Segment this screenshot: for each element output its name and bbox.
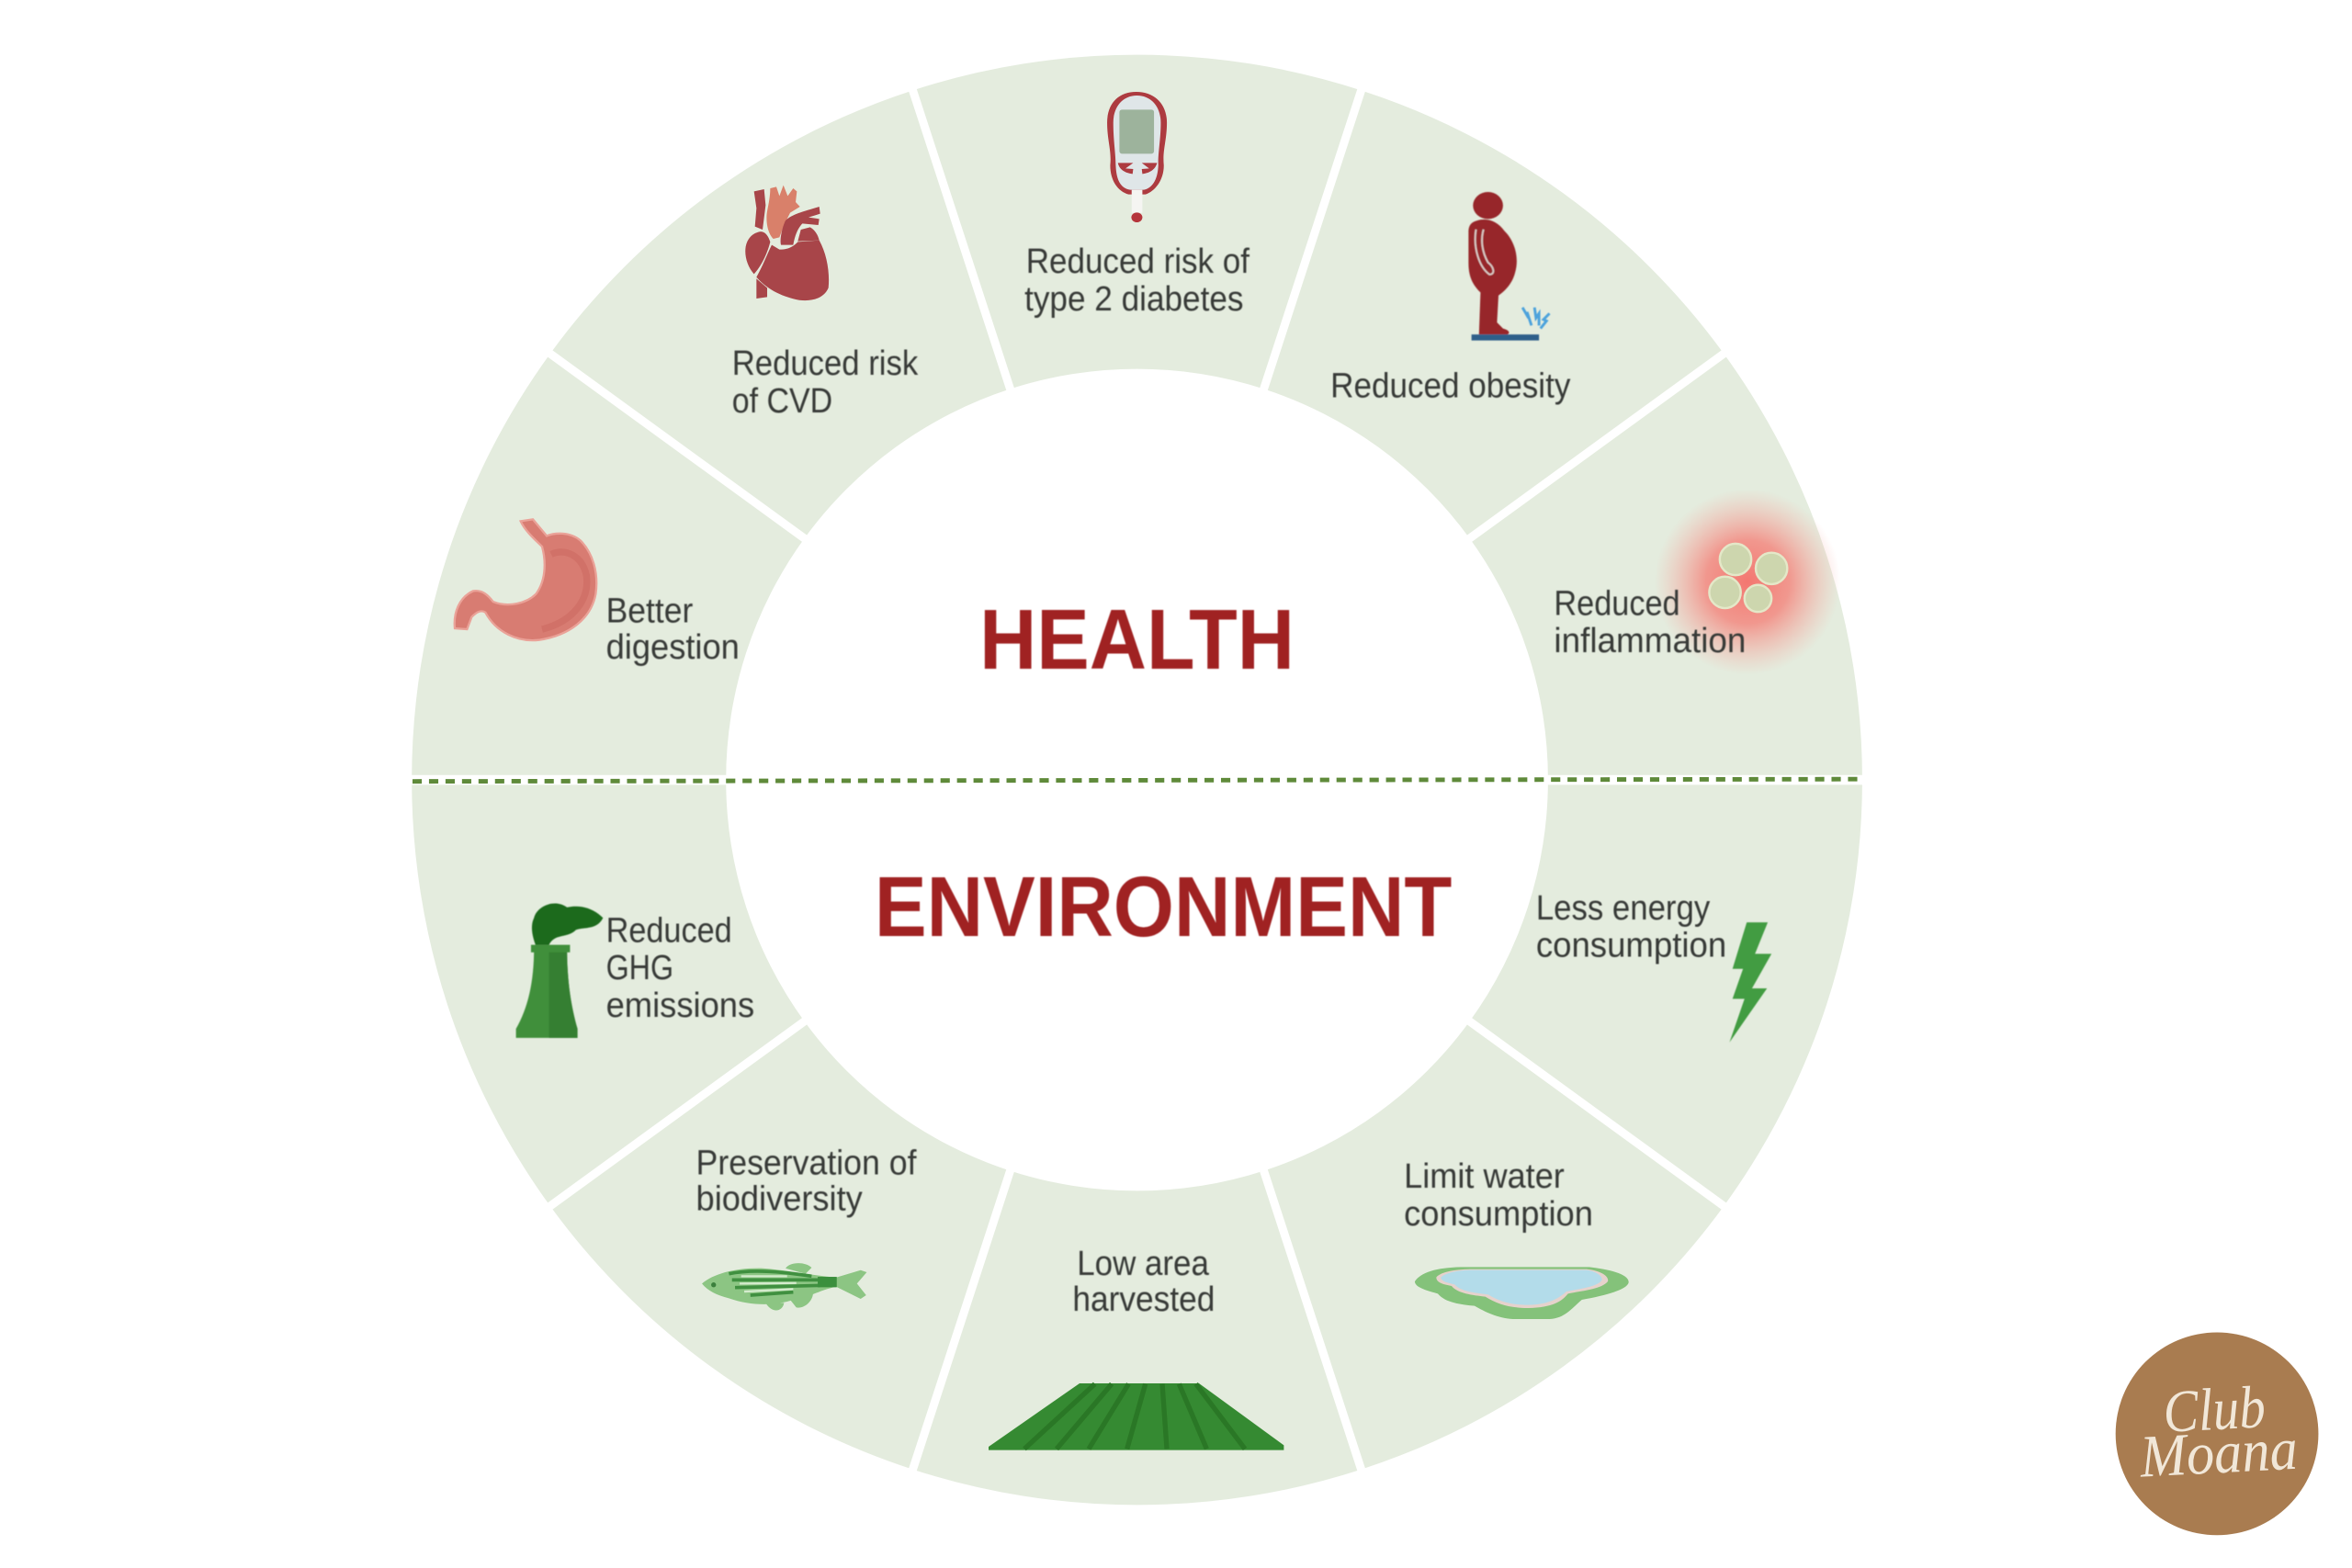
icon: stomach (455, 519, 596, 640)
label: limit water consumption (1404, 1156, 1593, 1233)
logo text: Moana (2138, 1416, 2299, 1491)
label: low area harvested: Low area (1077, 1244, 1209, 1282)
icon: lightning bolt (1729, 922, 1771, 1043)
label: reduced inflammation: Reduced (1554, 583, 1680, 622)
label: reduced risk of CVD: of CVD (732, 381, 832, 420)
heading: health: HEALTH (979, 592, 1295, 687)
label: less energy consumption: Less energy (1536, 888, 1710, 927)
panel: reduced risk of CVD (550, 90, 1010, 538)
panel: reduced inflammation (1470, 354, 1862, 780)
icon: glucose meter (1107, 92, 1167, 222)
panel: better digestion (412, 354, 805, 780)
icon: obese person on scale (1468, 192, 1550, 341)
icon: crop field (989, 1383, 1283, 1450)
icon: inflamed cells with red glow (1655, 489, 1840, 675)
label: reduced obesity: Reduced obesity (1330, 367, 1571, 405)
label: reduced GHG emissions: emissions (606, 986, 754, 1024)
label: better digestion (606, 592, 740, 666)
label: reduced risk of type 2 diabetes (1024, 242, 1250, 318)
logo text (2135, 1373, 2299, 1491)
label: preservation of biodiversity (696, 1143, 917, 1218)
panel: reduced obesity (1264, 90, 1724, 538)
panel: limit water consumption (1264, 1021, 1724, 1470)
label: preservation of biodiversity: Preservation of (696, 1143, 917, 1181)
label: reduced risk of CVD (732, 344, 918, 420)
icon: pond (1415, 1267, 1629, 1319)
label: reduced GHG emissions: GHG (606, 948, 673, 987)
panel: preservation of biodiversity (550, 1021, 1010, 1470)
label: reduced inflammation: inflammation (1554, 621, 1746, 660)
label: reduced inflammation (1554, 583, 1746, 660)
label: reduced GHG emissions (606, 910, 754, 1024)
label: less energy consumption (1536, 888, 1726, 964)
label: limit water consumption: consumption (1404, 1194, 1593, 1233)
panel: low area harvested (913, 1170, 1361, 1505)
label: reduced risk of type 2 diabetes: Reduced risk of (1026, 242, 1250, 280)
label: better digestion: Better (606, 592, 693, 630)
icon: heart (745, 186, 829, 300)
panel: reduced GHG emissions (412, 780, 805, 1206)
logo: Club Moana badge (2116, 1332, 2318, 1535)
label: limit water consumption: Limit water (1404, 1156, 1565, 1195)
logo text: Club (2162, 1374, 2267, 1446)
icon: zebrafish (702, 1263, 866, 1311)
icon: smokestack (516, 903, 603, 1038)
panel: less energy consumption (1470, 780, 1862, 1206)
label: less energy consumption: consumption (1536, 926, 1726, 964)
label: reduced risk of CVD: Reduced risk (732, 344, 918, 382)
label: reduced GHG emissions: Reduced (606, 910, 732, 949)
label: better digestion: digestion (606, 627, 740, 666)
label: reduced risk of type 2 diabetes: type 2 diabetes (1024, 279, 1243, 318)
label: low area harvested (1072, 1244, 1215, 1318)
heading: environment: ENVIRONMENT (875, 859, 1452, 954)
label: preservation of biodiversity: biodiversity (696, 1179, 863, 1218)
label: low area harvested: harvested (1072, 1280, 1215, 1318)
panel: reduced risk of type 2 diabetes (913, 55, 1361, 389)
